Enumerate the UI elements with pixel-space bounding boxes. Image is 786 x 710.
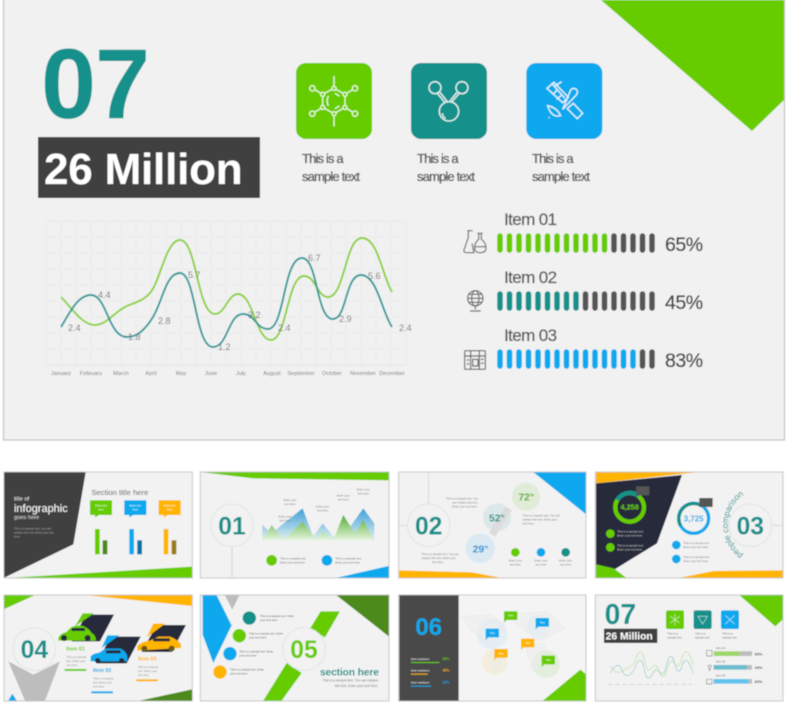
caption 3: sample text (532, 169, 590, 184)
data labels: 6.7 (308, 253, 321, 263)
icon tile: atoms (411, 63, 487, 139)
thumbnail: section 04 cars: This is a sample (93, 676, 114, 680)
thumbnail: infographic title slide: here (98, 507, 104, 511)
thumbnail: section 02: text here. (523, 522, 535, 526)
thumbnail: section 03: This is a sample text. (683, 555, 710, 559)
caption 2 (417, 151, 475, 184)
thumbnail: section 01: Enter your (283, 498, 297, 502)
icon: globe (468, 291, 483, 311)
thumbnail: section 04 cars: This is a sample (138, 665, 159, 669)
thumbnail: section 05: 05 (290, 637, 318, 664)
month axis labels: October (322, 371, 342, 377)
month axis labels: June (205, 371, 217, 377)
data labels: 1.2 (218, 342, 231, 352)
thumbnail: section 01: text here (279, 518, 291, 522)
thumbnail: infographic title slide: title of (14, 497, 30, 503)
month axis labels: February (80, 371, 102, 377)
caption 1: This is a (302, 151, 344, 166)
caption 2: sample text (417, 169, 475, 184)
thumbnail: section 03: This is a sample text. (617, 543, 644, 547)
thumbnail: section 05 (200, 595, 389, 701)
thumbnail: infographic title slide: here. (14, 535, 21, 539)
thumbnail: section 03: Enter your text here. (683, 545, 709, 549)
month axis labels: May (176, 371, 186, 377)
thumbnail: section 04 cars: This is a sample (66, 655, 87, 659)
thumbnail: section 04 cars: text here (138, 673, 149, 677)
thumbnail: section 04 cars: text. Enter your (93, 680, 112, 684)
thumbnail: section 05: This is a sample text. Enter (230, 668, 264, 672)
thumbnail: section 02: Enter your (509, 558, 522, 562)
thumbnail: section 02: Enter your (534, 558, 548, 562)
thumbnail: infographic title slide: Section title here (91, 488, 148, 497)
data labels: 5.7 (188, 270, 201, 280)
icon tile: satellite (526, 63, 602, 139)
thumbnail: section 03 (594, 471, 784, 579)
thumbnail: section 03: Enter your text here. (683, 559, 709, 563)
thumbnail: section 07 mini copy: This is a (667, 632, 678, 636)
thumbnail: section 03: Enter your text here. (617, 534, 643, 538)
thumbnail: section 01: Enter your (278, 514, 292, 518)
thumbnail: section 06 map: Text (490, 631, 495, 635)
progress: Item 02: Item 02 (504, 268, 557, 287)
thumbnail: section 02: 02 (415, 513, 442, 540)
line chart (46, 221, 412, 377)
thumbnail: section 02: % (530, 493, 535, 498)
thumbnail: section 06 map: Text (508, 614, 513, 618)
thumbnail: section 02: This is a sample text. You can (421, 552, 459, 556)
month axis labels: August (263, 371, 281, 377)
thumbnail: section 07 mini copy: sample text (722, 636, 737, 640)
thumbnail: section 07 mini copy: This is a (695, 632, 706, 636)
thumbnail: infographic title slide (4, 472, 192, 578)
icon tile: molecule hexagon (296, 63, 372, 139)
thumbnail: section 04 cars: 04 (21, 637, 48, 664)
thumbnail: section 07 mini copy: 83% (755, 679, 763, 684)
thumbnail: section 03: people comparison (722, 491, 744, 558)
data labels: 4.4 (98, 290, 111, 300)
thumbnail: section 06 map: Text (525, 641, 530, 645)
thumbnail: section 05: your text here (230, 672, 248, 676)
thumbnail: section 06 map: 06 (415, 614, 442, 641)
caption 2: This is a (417, 151, 459, 166)
progress: Item 03: 83% (665, 350, 703, 372)
thumbnail: section 06 map: 65% (443, 657, 449, 661)
thumbnail: section 07 mini copy: This is a (722, 632, 733, 636)
thumbnail: section 06 map: Text (540, 620, 545, 624)
thumbnail: section 02: text here (560, 562, 572, 566)
thumbnail: section 01: text here (358, 491, 369, 495)
progress: Item 02: 45% (665, 292, 703, 314)
thumbnail: section 06 map: Item numbers (411, 669, 430, 673)
thumbnail: section 07 mini copy: sample text (667, 636, 682, 640)
thumbnail: section 01: Enter your (337, 494, 350, 498)
teal series (61, 258, 392, 347)
data labels: 2.4 (68, 323, 81, 333)
thumbnail: section 05: section here (320, 667, 379, 678)
data labels: 2.8 (158, 316, 171, 326)
green series (61, 238, 392, 340)
thumbnail: infographic title slide: here (167, 507, 173, 511)
thumbnail: infographic title slide: Enter text (95, 503, 107, 507)
thumbnail: section 04 cars (4, 595, 192, 701)
thumbnail: section 03: 4,258 (620, 503, 639, 512)
thumbnail: section 05: this text. Enter your text here. (335, 684, 378, 688)
thumbnail: section 01: 01 (218, 513, 246, 540)
month axis labels (51, 371, 405, 377)
thumbnail: section 02: text here (510, 562, 521, 566)
thumbnail: section 01: Enter your (316, 505, 329, 509)
thumbnail: section 01: text here (317, 509, 329, 513)
thumbnail: section 05: This is a sample text. Enter (249, 631, 283, 635)
thumbnail: section 04 cars: Item 02 (93, 668, 111, 674)
thumbnail: section 02: 29 (473, 544, 484, 555)
month axis labels: September (287, 371, 315, 377)
month axis labels: November (350, 371, 376, 377)
thumbnail: section 07 mini copy: Item 03 (716, 673, 726, 677)
thumbnail: section 05: your text here (249, 635, 267, 639)
month axis labels: July (236, 371, 246, 377)
thumbnail: section 03: This is a sample text. (683, 541, 710, 545)
thumbnail: infographic title slide: goes here (14, 515, 39, 521)
thumbnail: section 07 mini copy: 45% (755, 665, 763, 670)
thumbnail: section 07 mini copy: Item 02 (716, 660, 726, 664)
thumbnail: section 07 mini copy: 26 Million (606, 632, 653, 643)
thumbnail: section 07 mini copy: 07 (605, 599, 636, 631)
thumbnail: section 03: This is a sample text. (617, 530, 644, 534)
thumbnail: section 01: This is a sample text. (335, 556, 362, 560)
month axis labels: December (379, 371, 405, 377)
thumbnail: section 06 map: Item numbers (411, 657, 430, 661)
thumbnail: section 02: replace this text. Enter your (523, 518, 557, 522)
data labels: 1.8 (128, 332, 141, 342)
thumbnail: section 02: This is a sample text. You (446, 496, 478, 500)
icon: calculator panel (465, 351, 485, 369)
thumbnail: section 05: This is a sample text. Enter (239, 649, 273, 653)
caption 3 (532, 151, 590, 184)
month axis labels: March (113, 371, 129, 377)
progress: Item 03: Item 03 (504, 326, 557, 345)
month axis labels: April (145, 371, 157, 377)
progress: Item 03 (465, 326, 703, 372)
thumbnail: infographic title slide: here (133, 507, 138, 511)
data labels: 2.4 (399, 323, 412, 333)
data labels: 2.4 (278, 323, 291, 333)
thumbnail: section 05: This is a sample text. You can replace (322, 678, 378, 682)
thumbnail: section 06 map: Item numbers (411, 681, 430, 685)
data labels: 5.6 (368, 271, 381, 281)
thumbnail: section 02 (399, 472, 586, 578)
thumbnail: section 02: can replace this text. (452, 500, 478, 504)
thumbnail: infographic title slide: Enter text (130, 503, 141, 507)
thumbnail: section 02: replace this text. Enter your (421, 556, 456, 560)
green corner shape (601, 0, 784, 131)
thumbnail: section 05: your text here (260, 618, 278, 622)
thumbnail: infographic title slide: infographic (14, 503, 68, 515)
thumbnail: section 07 mini copy: sample text (695, 636, 710, 640)
thumbnail: section 02: text here (535, 562, 547, 566)
thumbnail: section 01: text here (338, 498, 349, 502)
thumbnail: section 01: text here (284, 502, 296, 506)
thumbnail: section 04 cars: text. Enter your (138, 669, 157, 673)
thumbnail: section 02: This is a sample text. You can (523, 514, 560, 518)
thumbnail: section 04 cars: text here (66, 663, 78, 667)
caption 1 (302, 151, 360, 184)
thumbnail: section 01 (200, 472, 389, 578)
thumbnail: section 01: Enter your text here (335, 560, 361, 564)
thumbnail: section 01: Enter your (357, 487, 370, 491)
thumbnail: section 02: Enter your text here. (452, 504, 478, 508)
progress: Item 02 (468, 268, 703, 314)
thumbnail: section 06 map: Text (546, 658, 551, 662)
data labels (68, 253, 412, 352)
headline: 26 Million: 26 Million (44, 145, 242, 194)
thumbnail: section 04 cars: Item 03 (138, 657, 156, 663)
thumbnail: infographic title slide: replace this text. Enter your text (14, 531, 54, 535)
progress: Item 01 (464, 210, 703, 256)
month axis labels: January (51, 371, 71, 377)
data labels: 3.2 (248, 310, 261, 320)
thumbnail: section 07 mini copy (595, 595, 783, 701)
thumbnail: section 02: 72 (518, 493, 530, 504)
thumbnail: section 03: 03 (737, 513, 764, 540)
caption 1: sample text (302, 169, 360, 184)
thumbnail: infographic title slide: Enter text (164, 503, 176, 507)
thumbnail: section 02: text here. (432, 560, 444, 564)
thumbnail: infographic title slide: This is a sample text. you can (14, 527, 52, 531)
caption 3: This is a (532, 151, 574, 166)
main slide panel (4, 0, 784, 440)
thumbnail: section 03: 3,725 (684, 515, 704, 524)
thumbnail: section 02: % (500, 513, 505, 518)
thumbnail: section 07 mini copy: Item 01 (716, 646, 726, 650)
icon: flasks (464, 231, 486, 253)
thumbnail: section 03: Enter your text here. (617, 547, 643, 551)
thumbnail: section 04 cars: text here (93, 684, 104, 688)
thumbnail: section 06 map: 45% (443, 669, 449, 673)
thumbnail: section 04 cars: text. Enter your (66, 659, 86, 663)
progress: Item 01: 65% (665, 234, 703, 256)
thumbnail: section 05: This is a sample text. Enter (260, 614, 294, 618)
thumbnail: section 02: Enter your (559, 558, 572, 562)
thumbnail: section 06 map: 30% (443, 681, 449, 685)
big number 07: 07 (41, 28, 149, 139)
thumbnail: section 05: your text here (239, 653, 257, 657)
progress: Item 01: Item 01 (504, 210, 557, 229)
thumbnail: section 01: Enter your text here (280, 560, 305, 564)
thumbnail: section 06 map (399, 595, 586, 701)
data labels: 2.9 (339, 314, 352, 324)
thumbnail: section 02: 52 (489, 513, 500, 524)
thumbnail: section 01: This is a sample text. (280, 556, 307, 560)
thumbnail: section 06 map: Text (499, 651, 504, 655)
thumbnail: section 07 mini copy: 65% (755, 651, 763, 656)
thumbnail: section 04 cars: Item 01 (66, 647, 85, 653)
thumbnail: section 02: % (484, 544, 489, 549)
